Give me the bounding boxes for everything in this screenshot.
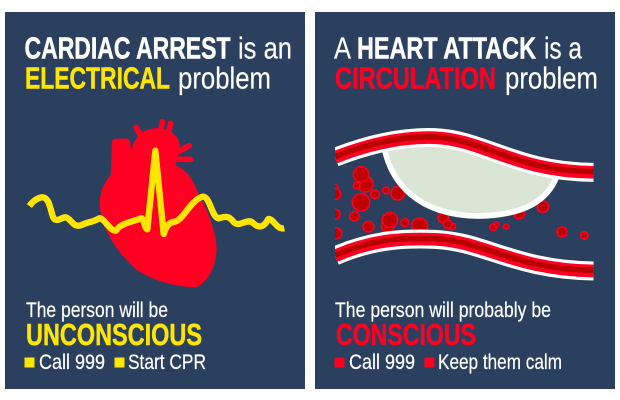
heading: cardiac arrest (24, 30, 292, 96)
heart (100, 122, 217, 287)
heading: heart attack: is a (544, 30, 583, 66)
heading: heart attack: HEART ATTACK (357, 30, 536, 66)
artery wall: bottom (335, 238, 594, 271)
list: actions: Start CPR (128, 351, 206, 374)
text: unconscious: UNCONSCIOUS (26, 317, 202, 352)
blood cells (329, 167, 588, 239)
heading: cardiac arrest: is an (238, 30, 292, 66)
text: the person will probably be: The person will probably be (335, 299, 551, 322)
artery wall: top (335, 137, 594, 172)
icon: heart with ECG trace (29, 122, 284, 287)
list: actions: Call 999 (39, 351, 105, 374)
text: the person will be: The person will be (26, 299, 168, 322)
panel: cardiac arrest (5, 12, 305, 389)
heading: cardiac arrest: ELECTRICAL (25, 60, 170, 96)
list: actions (335, 351, 562, 374)
illustration: narrowed artery (329, 137, 594, 271)
list: actions (25, 351, 206, 374)
list: actions: Keep them calm (438, 351, 562, 374)
text: conscious: CONSCIOUS (336, 317, 476, 352)
heading: heart attack (334, 30, 598, 96)
heading: heart attack: problem (505, 60, 598, 96)
heading: cardiac arrest: problem (178, 60, 271, 96)
heading: heart attack: A (334, 30, 351, 66)
ECG trace (29, 151, 284, 234)
heading: heart attack: CIRCULATION (335, 60, 496, 96)
list: actions: Call 999 (349, 351, 415, 374)
plaque (384, 138, 557, 216)
heading: cardiac arrest: CARDIAC ARREST (24, 30, 231, 66)
panel: heart attack (315, 12, 615, 389)
